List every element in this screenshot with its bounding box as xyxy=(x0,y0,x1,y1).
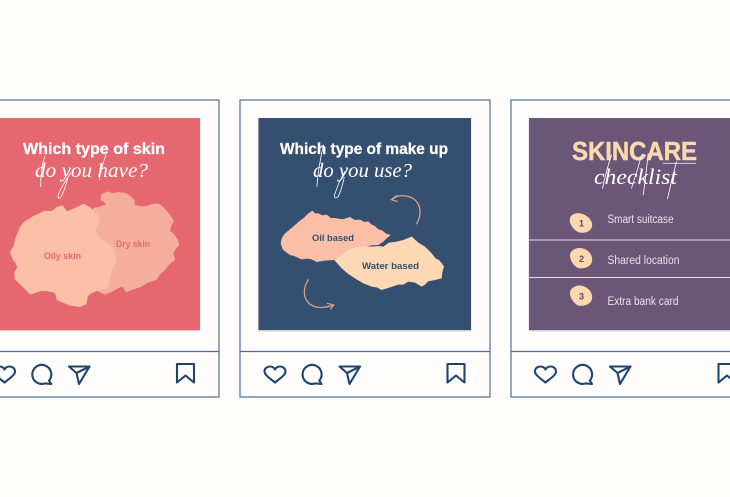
label: extra bank card: Extra bank card xyxy=(608,296,678,308)
script heading: do you have xyxy=(35,155,148,198)
item 3 xyxy=(570,286,678,308)
purple image panel xyxy=(529,118,730,330)
row dividers xyxy=(529,240,730,278)
frame divider xyxy=(0,350,219,352)
icon: bookmark xyxy=(718,364,730,382)
blob number 1 xyxy=(570,213,592,233)
arrow: lower curved xyxy=(304,279,334,309)
label: shared location: Shared location xyxy=(608,255,680,267)
item 1: 1 xyxy=(579,218,584,228)
icon: comment xyxy=(303,365,322,384)
script heading: checklist: checklist xyxy=(594,164,678,189)
script heading: do you have: do you have? xyxy=(35,160,148,182)
label: oily skin: Oily skin xyxy=(44,251,81,262)
blob: oily skin xyxy=(11,205,115,306)
icon: comment xyxy=(32,365,51,384)
icon: bookmark xyxy=(448,364,464,382)
brush: oil based xyxy=(281,211,391,262)
heading: which type of skin: Which type of skin xyxy=(23,141,165,158)
script heading: do you use: do you use? xyxy=(313,160,412,182)
icon: comment xyxy=(573,365,592,384)
panel: skin type post xyxy=(0,100,219,397)
arrow: upper curved xyxy=(391,195,420,224)
post frame xyxy=(240,100,490,397)
red image panel xyxy=(0,118,200,330)
frame divider xyxy=(511,350,730,352)
label: water based: Water based xyxy=(362,261,419,272)
icon: heart xyxy=(264,366,286,382)
item 2: 2 xyxy=(579,254,584,264)
icon: send xyxy=(69,366,90,384)
item 1 xyxy=(570,213,674,233)
blob number 2 xyxy=(570,248,592,268)
panel: make up type post xyxy=(240,100,490,397)
label: smart suitcase: Smart suitcase xyxy=(608,214,674,226)
label: oil based: Oil based xyxy=(312,233,354,244)
frame divider xyxy=(240,350,490,352)
item 3: 3 xyxy=(579,292,584,302)
blob number 3 xyxy=(570,286,592,306)
panel: skincare checklist post xyxy=(511,100,730,397)
post frame xyxy=(511,100,730,397)
icon: heart xyxy=(535,366,556,382)
label: dry skin: Dry skin xyxy=(116,239,150,250)
blob: dry skin xyxy=(93,193,178,293)
post frame xyxy=(0,100,219,397)
icon: send xyxy=(610,366,630,384)
navy image panel xyxy=(258,118,471,330)
heading: which type of make up: Which type of make up xyxy=(280,141,448,158)
brush: water based xyxy=(334,237,444,290)
item 2 xyxy=(570,248,680,268)
script heading: do you use xyxy=(313,145,412,198)
icon: bookmark xyxy=(177,364,194,382)
icon: send xyxy=(340,366,360,384)
icon: heart xyxy=(0,366,15,382)
script heading: checklist xyxy=(594,153,696,199)
heading: skincare: SKINCARE xyxy=(572,138,697,166)
